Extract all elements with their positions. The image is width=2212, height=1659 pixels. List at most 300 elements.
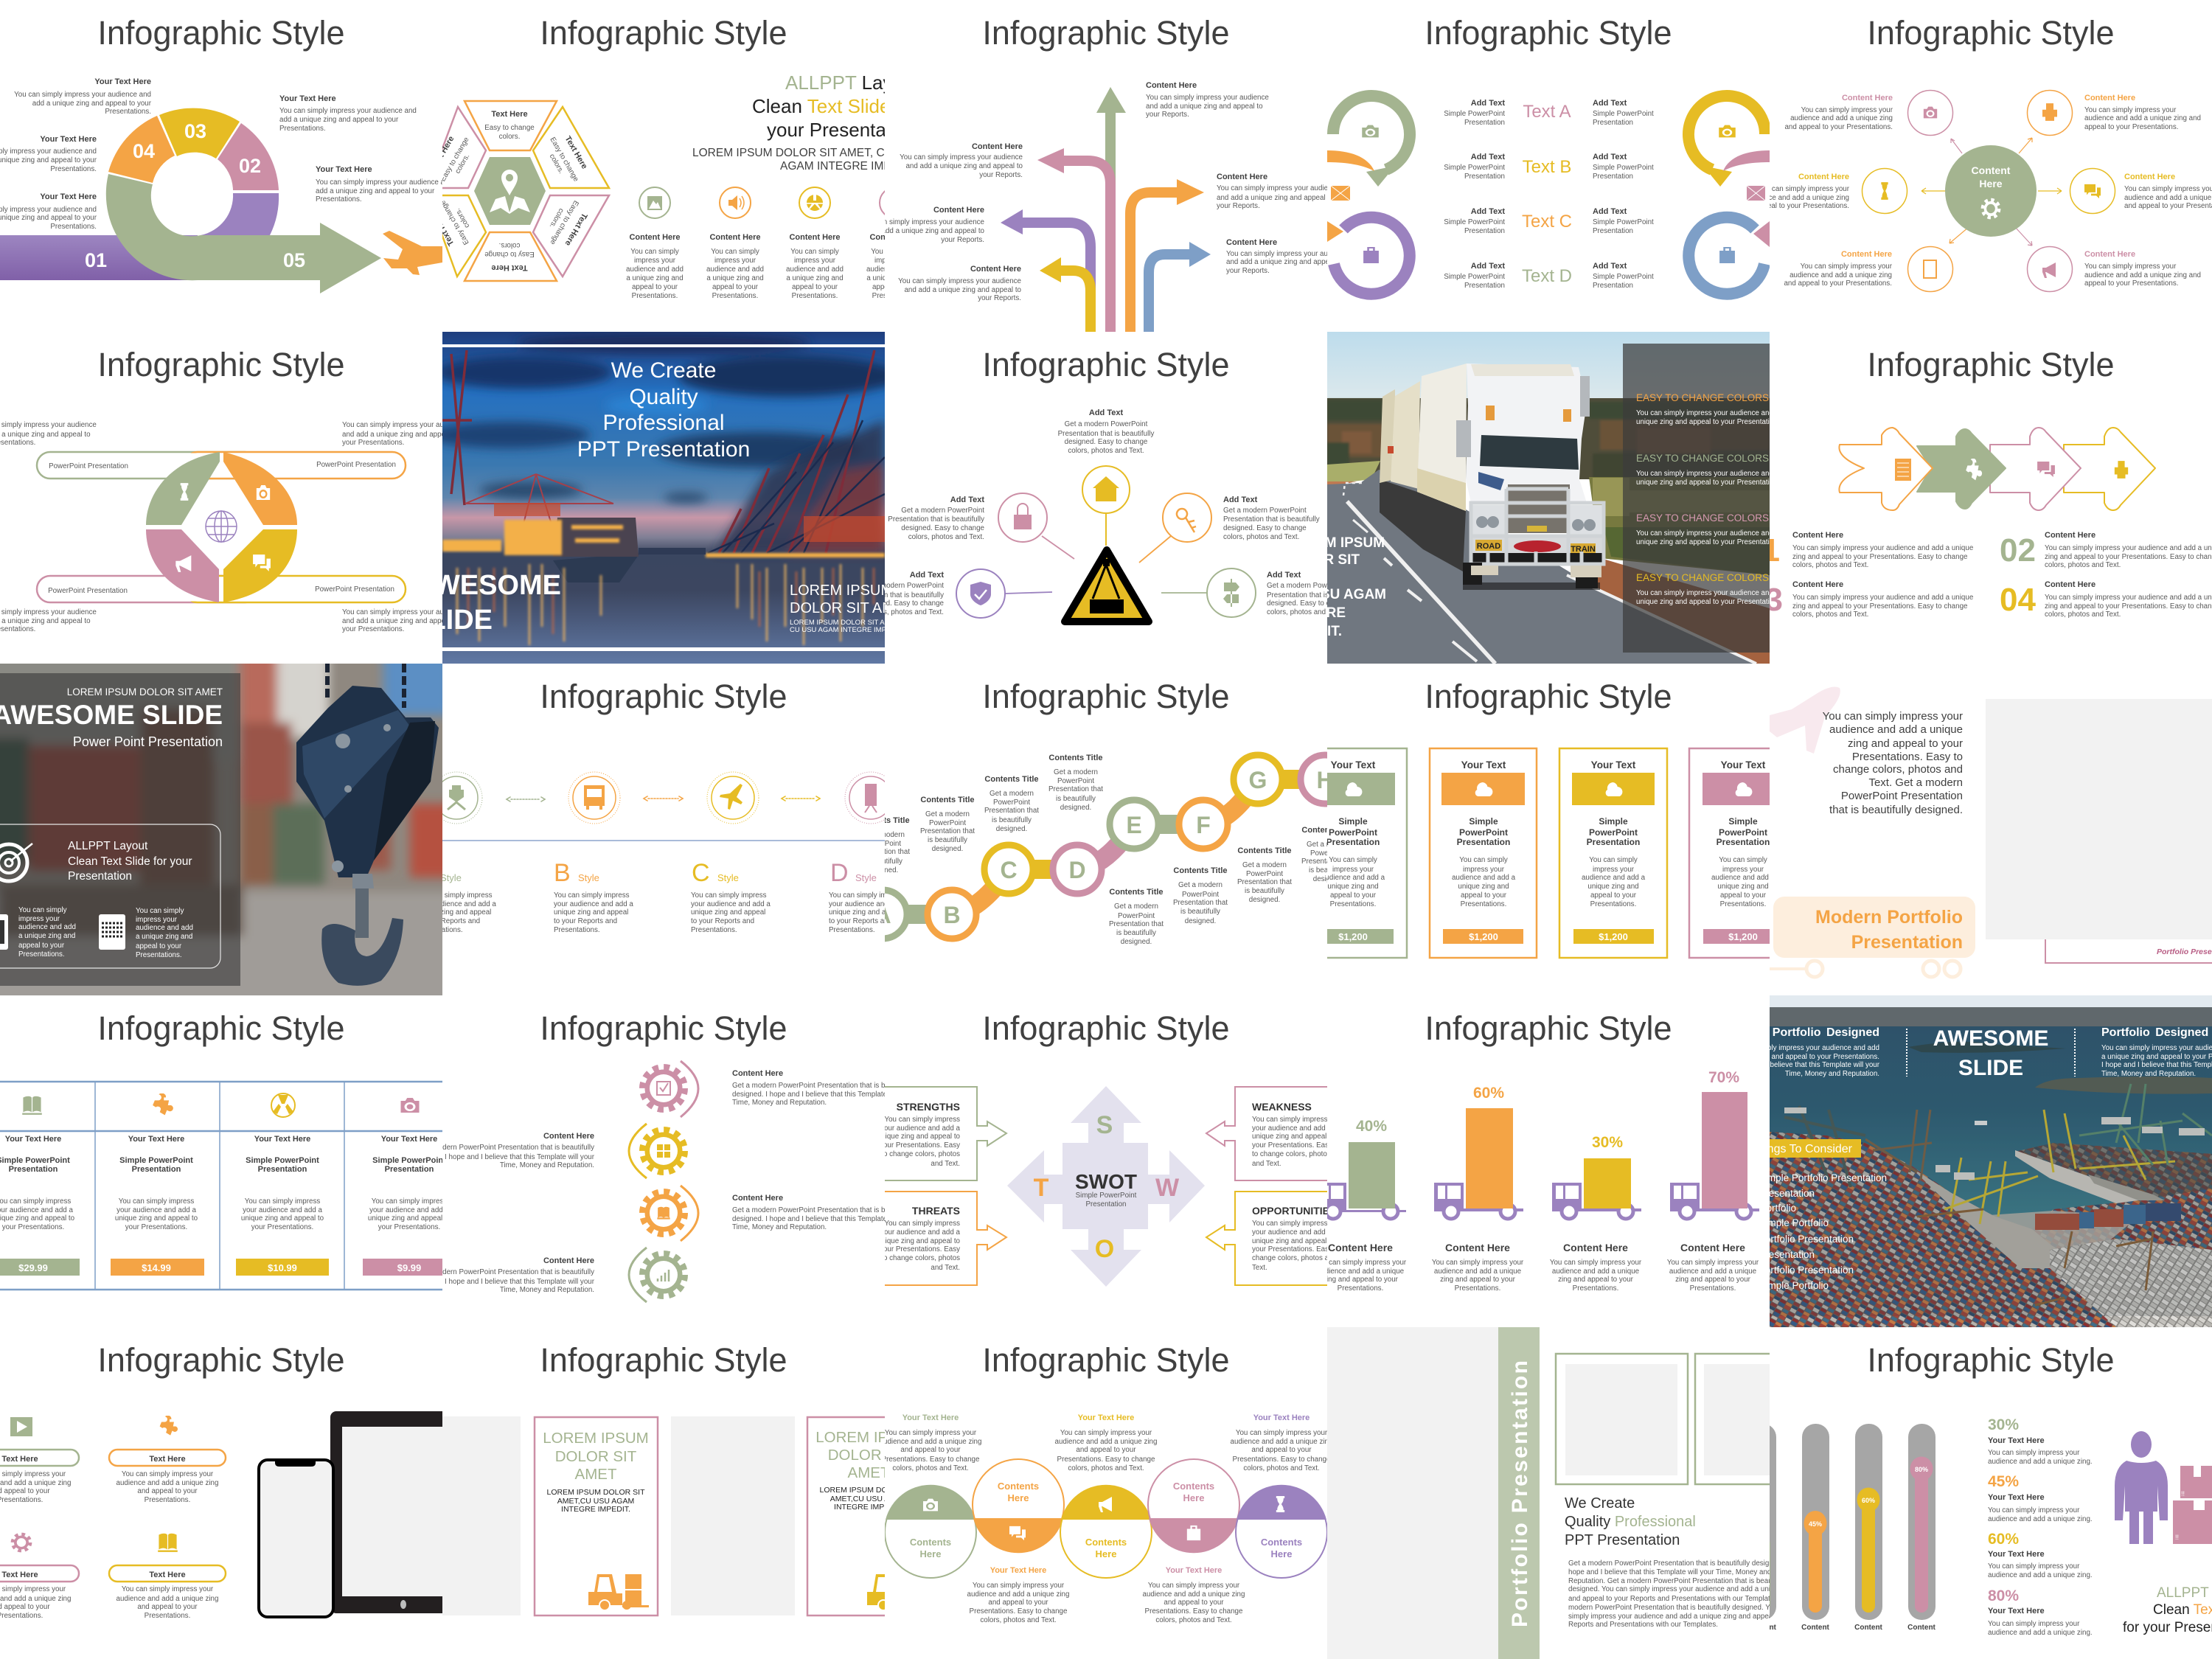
text block: middle left: You can simply impress your (1758, 185, 1850, 193)
text block: bottom right: audience and add a unique zing and (2084, 271, 2201, 279)
card 1: INTEGRE IMPEDIT. (561, 1505, 630, 1514)
column A (415, 859, 496, 934)
text block: content 2: You can simply impress your audience (900, 153, 1023, 161)
truck bar 30%: 30% (1592, 1134, 1623, 1151)
column D: Presentations. (829, 926, 875, 934)
pricing card pink: unique zing and (1717, 883, 1769, 891)
stat 60% (1988, 1531, 2093, 1579)
text block: easy to change 2 (1636, 453, 1794, 487)
heading: Infographic Style (1425, 678, 1672, 715)
icon: pale airplane (1770, 687, 1840, 754)
text block: content 2: Get a modern PowerPoint Presentation that is beautifully (413, 1144, 594, 1152)
text block: contents B: designed. (932, 845, 963, 853)
text block: content column 4: You can simply (871, 248, 919, 256)
text block: content 4: and add a unique zing and appeal to (904, 286, 1022, 294)
pricing card pink: PowerPoint (1719, 827, 1767, 838)
text block: top right: and add a unique zing and appeal to (342, 431, 459, 439)
pricing card pink: $1,200 (1728, 931, 1758, 942)
subtitle text: LOREM IPSUM DOLOR SIT AMET, (790, 619, 900, 627)
text block: item 2: You can simply impress your (122, 1470, 214, 1478)
dark overlay (1770, 1007, 2212, 1316)
panel: road train truck photo (1283, 332, 1794, 664)
card 2 (807, 1417, 931, 1615)
callout: yellow house (1082, 466, 1130, 513)
text block: add text right 1: Presentation that is beautifully (1223, 515, 1320, 524)
text rows A to D: Simple PowerPoint (1444, 218, 1505, 226)
gauge tube 4 (1907, 1424, 1936, 1632)
text rows A to D: Presentation (1593, 227, 1633, 235)
heading: Infographic Style (982, 678, 1230, 715)
number 02: 02 (2000, 532, 2036, 568)
text block: content 3: You can simply impress your audience (861, 218, 985, 226)
text block: content column 4: impress your (874, 257, 917, 265)
text block: content 6: and add a unique zing and appeal to (1226, 258, 1343, 266)
text block: item 4: Presentations. (145, 1612, 190, 1620)
hexagon diagram: Easy to change (439, 198, 471, 246)
text block: content column 2: audience and add (706, 265, 764, 274)
text block: orange: colors, photos and Text. (980, 1616, 1057, 1624)
paragraph: Get a modern PowerPoint Presentation that is beautifully designed. I (1568, 1559, 1787, 1568)
text block: content 2: Time, Money and Reputation. (500, 1161, 594, 1169)
icon: puzzle (160, 1416, 178, 1436)
text block: content 3: You can simply impress your (1550, 1259, 1642, 1267)
circle purple: Contents (1261, 1537, 1302, 1548)
pricing card green: Simple (1338, 816, 1368, 827)
text rows A to D: Simple PowerPoint (1444, 164, 1505, 172)
text block: contents D: designed. (1060, 804, 1091, 812)
icon: book (158, 1534, 178, 1552)
icon: hazard triangle (1065, 550, 1149, 622)
donut chart with arrow: 04 (133, 140, 155, 162)
heading: Infographic Style (982, 1341, 1230, 1379)
callout: orange keys (1163, 493, 1211, 542)
heading: Infographic Style (982, 14, 1230, 52)
text block: ALLPPT heading: ALLPPT Layout (785, 72, 919, 94)
text block: your text here 5: add a unique zing and appeal to your (316, 187, 435, 195)
text block: contents C: designed. (996, 825, 1027, 833)
donut chart with arrow: 01 (85, 249, 107, 271)
circle green (885, 1485, 976, 1578)
text block: contents D: Get a modern (1054, 768, 1098, 776)
text block: your text here 5: You can simply impress your audience and (316, 178, 453, 187)
truck bar 30% (1552, 1134, 1641, 1219)
column C: Presentations. (691, 926, 737, 934)
headline text (577, 358, 750, 462)
text block: add text left 1: Presentation that is beautifully (888, 515, 984, 524)
text block: easy to change 3: You can simply impress your audience and add a (1636, 529, 1794, 538)
text block: your text here 4: Your Text Here (279, 94, 336, 103)
text block: your text here 2: Your Text Here (40, 135, 97, 144)
text block: contents D: is beautifully (1056, 795, 1096, 803)
hexagon diagram: Text Here (563, 135, 589, 170)
pricing card green: impress your (1332, 866, 1374, 874)
stat 60%: Your Text Here (1988, 1550, 2045, 1559)
text block: your text here 2: Presentations. (50, 165, 97, 173)
image placeholder (1327, 1327, 1498, 1659)
column A: You can simply impress (417, 891, 493, 900)
subtitle text: LOREM IPSUM (790, 582, 893, 599)
satellite icons (1863, 90, 2115, 292)
headline text: Professional (602, 411, 725, 435)
text block: middle left: Content Here (1798, 173, 1849, 181)
chain diagram: B (943, 902, 961, 928)
card 2: LOREM IPSUM DOLOR SIT (819, 1486, 918, 1495)
title text: awesome slide: SLIDE (410, 605, 493, 636)
text block: column 2: You can simply (136, 907, 184, 915)
text block: add text left 1: colors, photos and Text. (908, 533, 984, 541)
list of portfolio items (1759, 1172, 1887, 1291)
circle yellow: Contents (1085, 1537, 1127, 1548)
panel: port photo cover (410, 332, 913, 664)
icon: target (0, 844, 32, 881)
gauge tube 4: Content (1907, 1624, 1936, 1632)
panel: pill list with device mockups (0, 1341, 442, 1620)
hexagon diagram: Easy to change (548, 199, 580, 246)
text block: easy to change 1: unique zing and appeal to your Presentations. (1636, 418, 1783, 426)
stat 80% (1988, 1587, 2093, 1637)
text block: top add text: colors, photos and Text. (1068, 447, 1144, 455)
text block: yellow: audience and add a unique zing (1055, 1438, 1157, 1446)
text block: content 3: Content Here (933, 206, 984, 215)
text block: portfolio designed left: I hope and I believe that this Template will your (1730, 1061, 1880, 1069)
column 2: unique zing and appeal to (115, 1214, 198, 1222)
title text: lorem ipsum (1283, 535, 1386, 639)
SWOT letters: T (1034, 1174, 1049, 1202)
card 1: DOLOR SIT (555, 1448, 637, 1465)
gear pink (642, 1061, 698, 1117)
gauge tube 3: 60% (1862, 1497, 1875, 1504)
text block: description: audience and add a unique (1829, 723, 1963, 736)
text block: yellow: You can simply impress your (1060, 1429, 1152, 1437)
text rows A to D: Add Text (1471, 99, 1505, 108)
text block: content 2: audience and add a unique (1434, 1267, 1522, 1276)
text block: purple: Your Text Here (1253, 1413, 1310, 1422)
gauge tube 1 (1748, 1424, 1777, 1632)
text block: your text here 1: Presentations. (105, 108, 151, 116)
text block: add text right 1: Add Text (1223, 495, 1258, 504)
column 2: $14.99 (142, 1262, 171, 1273)
column D: D (830, 859, 849, 887)
SWOT letters (1034, 1111, 1180, 1263)
divider line (442, 840, 885, 841)
text block: description: Presentations. Easy to (1852, 751, 1963, 763)
text rows A to D: Simple PowerPoint (1593, 110, 1654, 118)
text block: green: Presentations. Easy to change (882, 1455, 980, 1464)
text block: add text right 2: Add Text (1267, 571, 1301, 580)
text block: content 5: You can simply impress your audience (1217, 184, 1340, 192)
column A: unique zing and appeal (417, 908, 491, 917)
heading: Infographic Style (540, 1341, 787, 1379)
text block: column 2: audience and add (136, 924, 193, 932)
headline text: Quality (629, 385, 698, 409)
text block: green: audience and add a unique zing (880, 1438, 981, 1446)
text block: content column 4: a unique zing and (866, 274, 924, 282)
stat 30%: Your Text Here (1988, 1436, 2045, 1445)
chain diagram (858, 755, 1349, 939)
text block: content 4: You can simply impress your audience (898, 277, 1022, 285)
pricing card orange: Your Text (1461, 759, 1506, 771)
text block: contents D: PowerPoint (1057, 777, 1094, 785)
column 4: Simple PowerPoint (372, 1156, 446, 1165)
text block: easy to change 1: EASY TO CHANGE COLORS, (1636, 392, 1772, 403)
text block: content column 1: audience and add (626, 265, 684, 274)
text block: portfolio designed right: Portfolio Designed (2101, 1026, 2208, 1039)
text block: content 1: and add a unique zing and appeal to (1146, 102, 1263, 111)
gauge tube 3 (1854, 1424, 1883, 1632)
photo frame 2 (1695, 1354, 1827, 1484)
text block: content 03: zing and appeal to your Presentations. Easy to change (1792, 602, 1968, 611)
image placeholder (1986, 699, 2212, 939)
pricing card green: unique zing and (1327, 883, 1379, 891)
text block: strengths: You can simply impress (884, 1116, 960, 1124)
pricing card pink: appeal to your (1720, 891, 1767, 900)
column A: A (415, 859, 432, 887)
text block: pink: colors, photos and Text. (1155, 1616, 1232, 1624)
text block: content 4: zing and appeal to your (1675, 1276, 1751, 1284)
column 1: Your Text Here (5, 1135, 61, 1144)
text block: your text here 1: Your Text Here (94, 77, 151, 86)
text block: content column 1: a unique zing and (626, 274, 684, 282)
panel: circular arrows Text A to D (1327, 14, 1770, 300)
stat 30%: 30% (1988, 1416, 2019, 1433)
text block: ALLPPT heading: LOREM IPSUM DOLOR SIT AMET, CU USU (692, 147, 920, 159)
text block: top right: You can simply impress your audience (342, 421, 465, 429)
text block: easy to change 4: EASY TO CHANGE COLORS, (1636, 572, 1772, 583)
truck bar 70%: 70% (1708, 1069, 1739, 1086)
text block: description: PowerPoint Presentation (1841, 790, 1963, 802)
column 2: Your Text Here (128, 1135, 184, 1144)
text block: threats: to change colors, photos (881, 1254, 960, 1262)
truck bar 40% (1317, 1118, 1406, 1219)
title text: lorem ipsum: DOLOR SIT (1284, 552, 1360, 568)
icon: radiation circle (799, 187, 830, 218)
text block: content 1: Presentations. (1338, 1284, 1383, 1293)
text block: ALLPPT heading: AGAM INTEGRE IMPEDIT. (780, 160, 919, 173)
text block: contents F: is beautifully (1180, 908, 1220, 916)
pricing card pink: You can simply (1719, 856, 1767, 864)
paragraph: hope and I believe that this Template will your Time, Money and (1568, 1568, 1771, 1576)
text block: orange: Your Text Here (990, 1566, 1046, 1575)
text block: contents C: PowerPoint (993, 799, 1030, 807)
pricing card pink: Your Text (1721, 759, 1766, 771)
column 3: Your Text Here (254, 1135, 310, 1144)
icon: book (22, 1096, 42, 1115)
icon: radiation (271, 1093, 295, 1117)
text block: top add text: Presentation that is beautifully (1058, 430, 1154, 438)
text block: content 4: audience and add a unique (1669, 1267, 1757, 1276)
rounded content box (0, 824, 220, 968)
circle orange (973, 1459, 1064, 1553)
text block: ALLPPT layout (68, 840, 192, 883)
text block: add text right 2: designed. Easy to change (1267, 599, 1350, 608)
stat 45% (1988, 1473, 2093, 1523)
pricing card pink: impress your (1722, 866, 1764, 874)
text block: content 4: Get a modern PowerPoint Presentation that is beautifully (413, 1268, 594, 1276)
panel: hazard triangle with callouts (847, 346, 1363, 625)
text block: content 3: your Reports. (941, 236, 984, 244)
text block: opportunities: OPPORTUNITIES (1252, 1205, 1336, 1217)
hub circle: Here (1979, 178, 2003, 189)
list of portfolio items: Simple Portfolio Presentation (1759, 1172, 1887, 1183)
text block: content 2: Content Here (543, 1132, 594, 1141)
column 3: $10.99 (268, 1262, 297, 1273)
text block: contents A: Contents Title (855, 816, 910, 825)
text rows A to D: Presentation (1593, 282, 1633, 290)
text block: content 03: You can simply impress your audience and add a unique (1792, 594, 1974, 602)
icon: stacked boxes (2173, 1466, 2212, 1544)
heading: Infographic Style (1425, 14, 1672, 52)
donut chart with arrow: 03 (184, 120, 206, 142)
text block: content column 3: Presentations. (792, 292, 838, 300)
hub circle (1945, 145, 2037, 237)
text block: your text here 4: You can simply impress your audience and (279, 107, 417, 115)
panel: hub and spoke (1741, 14, 2212, 292)
text block: column 2: Presentations. (136, 951, 182, 959)
pricing card green (1300, 748, 1407, 958)
text block: purple: Presentations. Easy to change (1233, 1455, 1331, 1464)
text block: column 1: You can simply (18, 906, 67, 914)
heading text: PPT Presentation (1565, 1532, 1680, 1548)
text block: contents F: Contents Title (1173, 866, 1228, 875)
circle yellow (1060, 1485, 1152, 1578)
heading: Infographic Style (97, 14, 345, 52)
text block: content 1: Content Here (732, 1069, 783, 1078)
text block: column 1: appeal to your (18, 942, 65, 950)
text block: contents F: Presentation that (1173, 899, 1228, 907)
column 2: Presentation (132, 1165, 181, 1174)
circle green: Here (920, 1548, 941, 1559)
column 1 (0, 1135, 80, 1276)
left circular arrows (1327, 96, 1410, 294)
text block: description: You can simply impress your (1823, 710, 1963, 723)
column D: unique zing and appeal (829, 908, 903, 917)
text block: strengths: your Presentations. Easy (880, 1141, 960, 1150)
text rows A to D (1444, 99, 1654, 290)
text block: contents G: Get a modern (1242, 861, 1287, 869)
stat 80%: Your Text Here (1988, 1607, 2045, 1615)
text block: content 04: Content Here (2045, 580, 2096, 589)
text block: contents B: is beautifully (928, 836, 967, 844)
text block: content 01: You can simply impress your audience and add a unique (1792, 544, 1974, 552)
pricing card yellow: Simple (1599, 816, 1628, 827)
gauge tube 1: Content (1748, 1624, 1777, 1632)
title text: lorem ipsum: LOREM IPSUM (1286, 535, 1385, 551)
text block: threats: your Presentations. Easy (880, 1245, 960, 1253)
pricing card pink (1689, 748, 1797, 958)
title: awesome slide: AWESOME (1933, 1026, 2048, 1051)
text block: contents F: designed. (1185, 917, 1216, 925)
panel: transport modes timeline (415, 678, 908, 934)
text block: orange: and appeal to your (988, 1599, 1048, 1607)
text block: content 03: colors, photos and Text. (1792, 611, 1868, 619)
text block: weakness: to change colors, photos (1252, 1150, 1331, 1158)
icon: ship circle (431, 772, 482, 824)
text block: description: zing and appeal to your (1848, 737, 1963, 750)
text block: content column 3: impress your (794, 257, 836, 265)
text block: content 01: colors, photos and Text. (1792, 561, 1868, 569)
stat 45%: 45% (1988, 1473, 2019, 1490)
SWOT letters: O (1095, 1235, 1114, 1263)
text block: easy to change 1: You can simply impress your audience and add a (1636, 409, 1794, 417)
icon: pink circle (880, 187, 911, 218)
pricing card orange (1430, 748, 1537, 958)
hexagon diagram: colors. (548, 207, 566, 229)
connector lines (1005, 513, 1207, 594)
text block: yellow: Your Text Here (1078, 1413, 1134, 1422)
text block: add text left 2: colors, photos and Text. (868, 608, 944, 616)
panel: portfolio presentation (1327, 1327, 1800, 1659)
panel: branching arrows (861, 14, 1349, 332)
text block: weakness: unique zing and appeal to (1252, 1133, 1335, 1141)
donut chart with arrow (0, 108, 381, 293)
heading: Infographic Style (540, 678, 787, 715)
text block: content 04: colors, photos and Text. (2045, 611, 2121, 619)
pricing card yellow: Presentations. (1590, 900, 1636, 908)
photo: truck on outback road: TRAIN (1571, 545, 1596, 554)
headline text: We Create (611, 358, 716, 383)
panel: aerial port photo (1726, 995, 2212, 1327)
text block: green: Your Text Here (902, 1413, 959, 1422)
text block: add text right 1: colors, photos and Text. (1223, 533, 1299, 541)
text rows A to D: Presentation (1464, 119, 1505, 127)
circle pink: Here (1183, 1492, 1204, 1503)
column B: B (554, 859, 571, 887)
icon: puzzle (153, 1093, 173, 1115)
text block: purple: audience and add a unique zing (1231, 1438, 1332, 1446)
text block: your text here 3: Your Text Here (40, 192, 97, 201)
column 3: your audience and add a (243, 1206, 322, 1214)
icon: gear (13, 1534, 30, 1551)
truck bar 60% (1434, 1085, 1523, 1219)
text block: green: and appeal to your (900, 1446, 961, 1454)
hub circle: Content (1972, 164, 2011, 176)
pricing card yellow: You can simply (1589, 856, 1638, 864)
column B: unique zing and appeal (554, 908, 628, 917)
column 2: your audience and add a (116, 1206, 196, 1214)
text block: contents B: Presentation that (920, 827, 975, 835)
column 4 (363, 1135, 456, 1276)
column 4: unique zing and appeal to (368, 1214, 451, 1222)
text block: content column 4: Presentations. (872, 292, 918, 300)
text block: pink: Your Text Here (1166, 1566, 1222, 1575)
image placeholder 2 (671, 1416, 795, 1615)
truck bar 60%: 60% (1473, 1085, 1504, 1102)
title: awesome slide: SLIDE (1958, 1056, 2023, 1080)
text block: content 4: your Reports. (978, 294, 1021, 302)
text block: easy to change 2: You can simply impress your audience and add a (1636, 470, 1794, 478)
list of portfolio items: Presentation (1759, 1249, 1815, 1260)
icon: image circle (639, 187, 670, 218)
text block: your text here 1: You can simply impress your audience and (14, 91, 151, 99)
circle orange: Contents (998, 1481, 1039, 1492)
text block: bottom left: Content Here (1841, 250, 1892, 259)
SWOT center label: SWOT (1075, 1170, 1137, 1193)
text block: column 1: audience and add (18, 923, 76, 931)
donut chart with arrow: 05 (283, 249, 305, 271)
chain diagram: A (874, 902, 891, 928)
text block: bottom left: and appeal to your Presentations. (1784, 279, 1892, 288)
column C: unique zing and appeal (691, 908, 765, 917)
hexagon diagram: Easy to change (484, 250, 535, 258)
text block: top left: Content Here (1842, 94, 1893, 102)
text block: bottom right: and add a unique zing and appeal to (342, 617, 459, 625)
frame: threats (885, 1192, 1006, 1285)
text block: content column 4: appeal to your (872, 283, 919, 291)
panel: modern portfolio (1770, 687, 2212, 979)
heading: modern portfolio presentation: Modern Portfolio (1815, 907, 1963, 928)
pill: orange: Text Here (149, 1455, 186, 1464)
SWOT letters: W (1155, 1174, 1180, 1202)
